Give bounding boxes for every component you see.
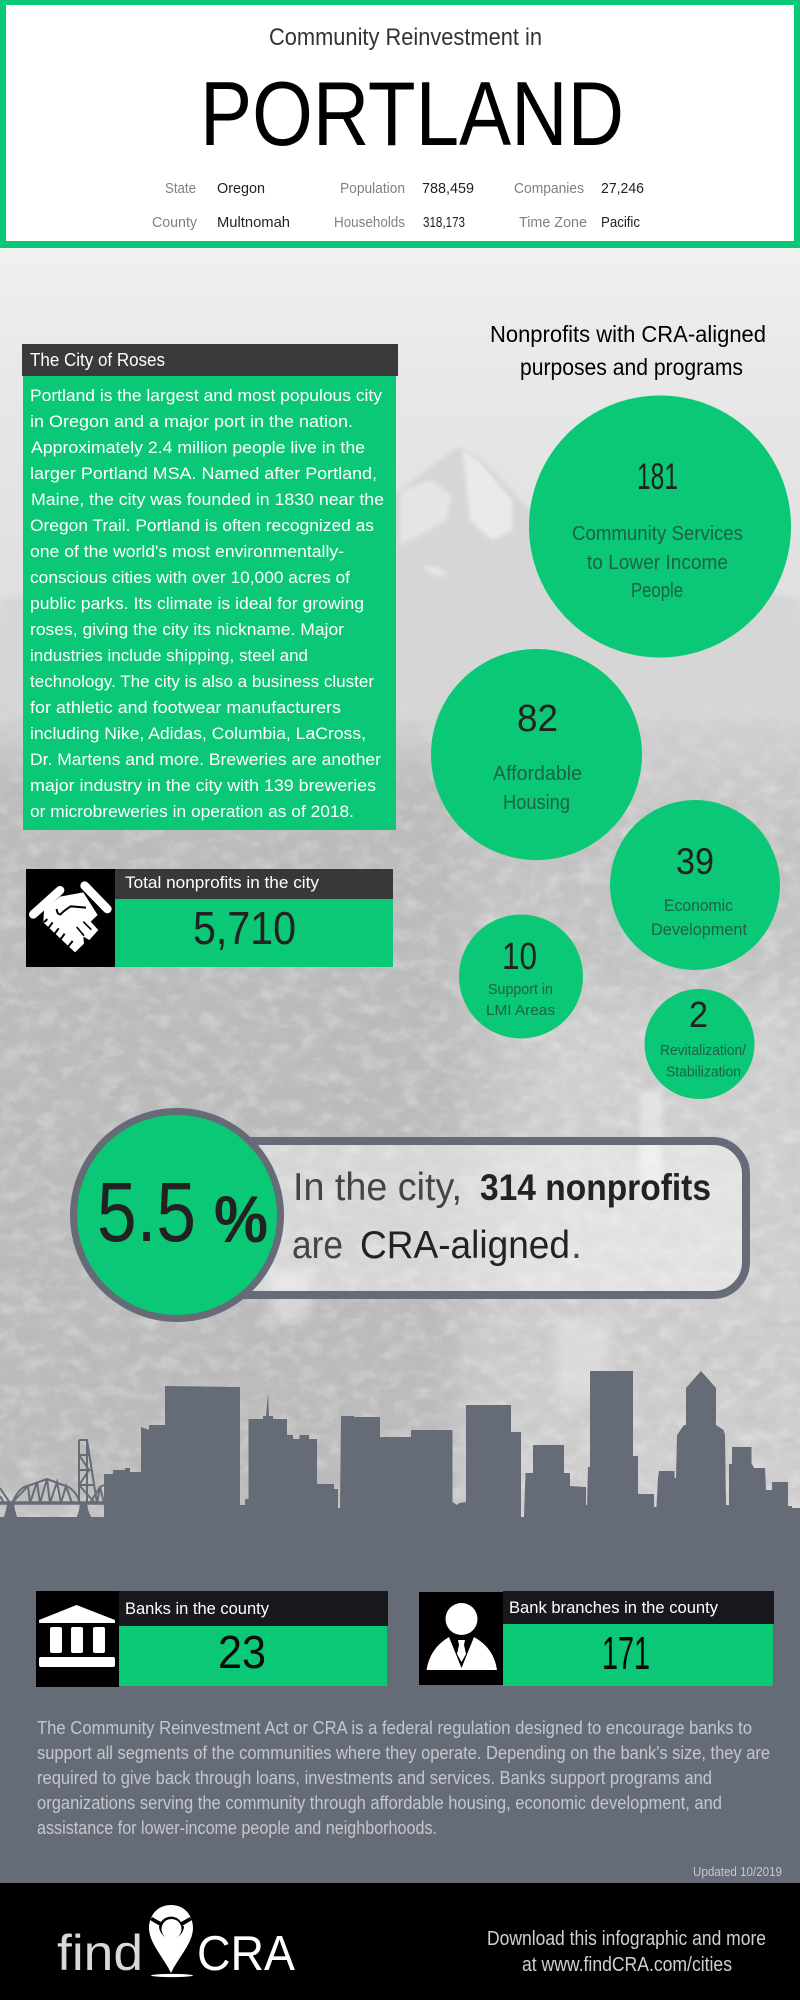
bubble: economic development: Economic (664, 896, 733, 915)
bubble: revitalization / stabilization: Stabilization (666, 1064, 741, 1080)
panel body text: technology. The city is also a business cluster (30, 672, 374, 691)
stats table: 788,459 (422, 180, 474, 197)
bubble: support in LMI areas: Support in (488, 981, 553, 998)
callout text: 314 nonprofits (480, 1167, 711, 1208)
card label: Total nonprofits in the city (125, 873, 320, 892)
bubble: community services: Community Services (572, 523, 743, 545)
icon: person in suit (426, 1603, 497, 1670)
background photo: mountain and city (0, 248, 800, 1548)
bubble: community services: People (631, 580, 683, 602)
panel: the city of roses (22, 344, 398, 830)
card value: 5,710 (193, 902, 296, 954)
card value: 23 (218, 1626, 266, 1678)
panel body text: industries include shipping, steel and (30, 646, 308, 665)
stats table: County (152, 214, 197, 231)
bubble: revitalization / stabilization: 2 (689, 994, 708, 1035)
bubble: affordable housing (431, 649, 642, 860)
panel body text: Approximately 2.4 million people live in the (31, 438, 365, 457)
bubble: support in LMI areas (459, 914, 583, 1038)
stats table: Multnomah (217, 214, 290, 231)
panel body text: major industry in the city with 139 breweries (30, 776, 376, 795)
panel body text: conscious cities with over 10,000 acres of (30, 568, 350, 587)
bubble: economic development: Development (651, 920, 747, 939)
text block: about the CRA: organizations serving the community through affordable housing, economic development, and (37, 1793, 722, 1813)
bubble: affordable housing: Affordable (493, 763, 582, 785)
callout circle (74, 1112, 280, 1318)
card label: Bank branches in the county (509, 1598, 718, 1617)
callout text: In the city, (293, 1166, 462, 1209)
bubble: revitalization / stabilization (644, 989, 754, 1099)
stats table: Pacific (601, 214, 640, 231)
text block: about the CRA: assistance for lower-income people and neighborhoods. (37, 1818, 437, 1838)
heading: nonprofits with CRA-aligned purposes: Nonprofits with CRA-aligned (490, 321, 766, 347)
stat card: bank branches in the county (419, 1591, 774, 1686)
download text: Download this infographic and more (487, 1928, 766, 1950)
title: PORTLAND (200, 64, 624, 165)
updated date: Updated 10/2019 (693, 1864, 782, 1879)
download text: at www.findCRA.com/cities (522, 1954, 732, 1976)
bubble: community services (529, 396, 791, 658)
bubble: affordable housing: Housing (503, 792, 570, 814)
callout frame (150, 1141, 746, 1295)
panel heading (22, 344, 398, 376)
bubble: revitalization / stabilization: Revitalization/ (660, 1042, 747, 1059)
stats table: Time Zone (519, 214, 587, 231)
panel body text: or microbreweries in operation as of 2018. (30, 802, 354, 821)
bubble: community services: to Lower Income (587, 552, 728, 574)
stat card: banks in the county (36, 1591, 388, 1687)
panel body text: roses, giving the city its nickname. Major (30, 620, 344, 639)
callout: 5.5% CRA-aligned (74, 1112, 746, 1318)
bubble: community services: 181 (637, 456, 678, 497)
panel body text (23, 376, 396, 830)
panel body text: Maine, the city was founded in 1830 near the (31, 490, 384, 509)
panel body text: one of the world's most environmentally- (30, 542, 344, 561)
bubble: support in LMI areas: 10 (502, 936, 537, 978)
icon: handshake (33, 886, 107, 952)
logo: findCRA: CRA (197, 1927, 295, 1981)
callout text (292, 1166, 711, 1267)
panel body text: Dr. Martens and more. Breweries are another (30, 750, 381, 769)
panel heading: The City of Roses (30, 350, 165, 370)
callout text: CRA-aligned (360, 1224, 570, 1267)
text block: about the CRA: required to give back through loans, investments and services. Banks support programs and (37, 1768, 712, 1788)
stats table: Oregon (217, 180, 265, 197)
stats table: 27,246 (601, 180, 644, 197)
panel body text: Portland is the largest and most populous city (30, 386, 383, 405)
stat card: total nonprofits (26, 869, 393, 967)
panel body text: including Nike, Adidas, Columbia, LaCross, (30, 724, 366, 743)
subtitle: Community Reinvestment in (269, 24, 542, 51)
header panel (0, 0, 800, 248)
stats table: Companies (514, 180, 584, 197)
stats table: Population (340, 180, 405, 197)
bubble: support in LMI areas: LMI Areas (486, 1002, 555, 1019)
download text (487, 1928, 766, 1976)
city skyline silhouette (0, 1371, 800, 1890)
panel body text: for athletic and footwear manufacturers (30, 698, 341, 717)
card label: Banks in the county (125, 1599, 269, 1618)
stats table: Households (334, 214, 405, 231)
bubble: economic development (610, 800, 780, 970)
stats table (152, 180, 644, 231)
bridge (0, 1440, 104, 1517)
panel body text: public parks. Its climate is ideal for growing (30, 594, 364, 613)
card value: 171 (602, 1627, 650, 1679)
icon: bank building (39, 1605, 115, 1667)
stats table: State (165, 180, 196, 197)
callout text: . (571, 1224, 582, 1267)
callout text: are (292, 1224, 343, 1267)
logo: findCRA (57, 1905, 295, 1981)
callout percentage: % (214, 1182, 268, 1256)
text block: about the CRA (37, 1718, 770, 1838)
stats table: 318,173 (423, 214, 465, 231)
callout percentage (97, 1165, 268, 1259)
logo: findCRA: find (57, 1925, 143, 1981)
icon: location pin with person (149, 1905, 193, 1977)
panel body text: in Oregon and a major port in the nation. (30, 412, 353, 431)
heading: nonprofits with CRA-aligned purposes (490, 321, 766, 380)
panel body text: larger Portland MSA. Named after Portland, (30, 464, 377, 483)
bubble: economic development: 39 (676, 841, 714, 882)
bubble: affordable housing: 82 (517, 698, 558, 740)
heading: nonprofits with CRA-aligned purposes: purposes and programs (520, 354, 743, 380)
panel body text: Oregon Trail. Portland is often recognized as (30, 516, 374, 535)
callout percentage: 5.5 (97, 1165, 196, 1259)
text block: about the CRA: The Community Reinvestment Act or CRA is a federal regulation designed to encourage banks to (37, 1718, 752, 1738)
footer (0, 1883, 800, 2000)
